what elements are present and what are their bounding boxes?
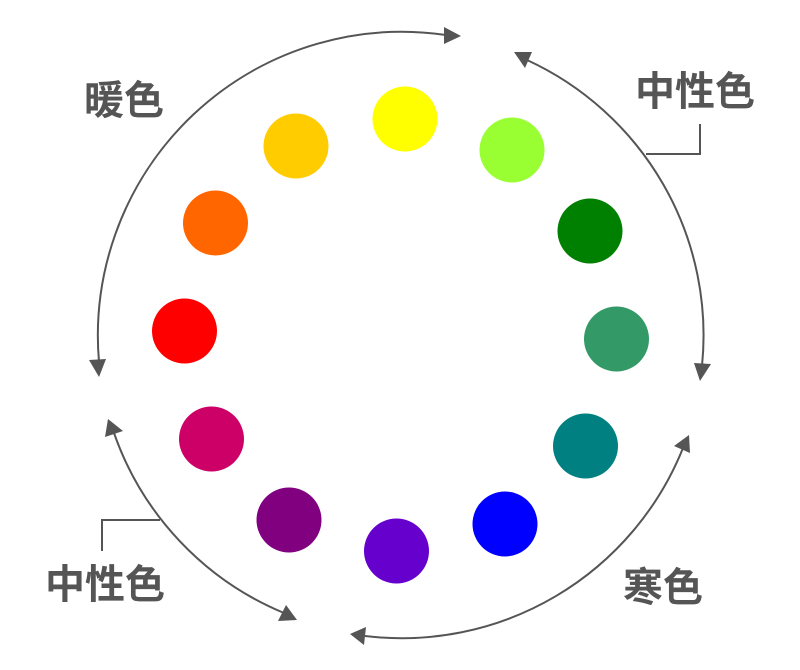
leader line: right neutral bbox=[646, 124, 700, 154]
color dot: blue-violet bbox=[364, 518, 429, 584]
color dot: amber bbox=[264, 114, 328, 178]
color dot: orange bbox=[183, 190, 248, 256]
color dot: blue bbox=[472, 492, 538, 556]
color dot: purple bbox=[256, 488, 322, 552]
leader line: left neutral bbox=[102, 520, 160, 551]
color dot: magenta bbox=[179, 406, 244, 472]
color dot: green bbox=[558, 198, 622, 264]
color dot: yellow-green bbox=[480, 118, 544, 182]
arrow: cool colors arc bbox=[350, 435, 690, 645]
label: right neutral colors: 中性色 bbox=[635, 70, 755, 114]
arrow: warm colors arc bbox=[89, 27, 461, 377]
arrow: right neutral arc bbox=[514, 52, 711, 381]
color dot: red bbox=[152, 298, 217, 364]
color dot: yellow bbox=[372, 86, 438, 152]
label: warm colors: 暖色 bbox=[84, 79, 164, 123]
arrow: left neutral arc bbox=[105, 419, 297, 621]
color dot: teal bbox=[553, 414, 618, 478]
color dot: sea green bbox=[584, 306, 649, 372]
color wheel bbox=[152, 86, 649, 584]
label: left neutral colors: 中性色 bbox=[45, 563, 165, 607]
label: cool colors: 寒色 bbox=[623, 566, 703, 610]
